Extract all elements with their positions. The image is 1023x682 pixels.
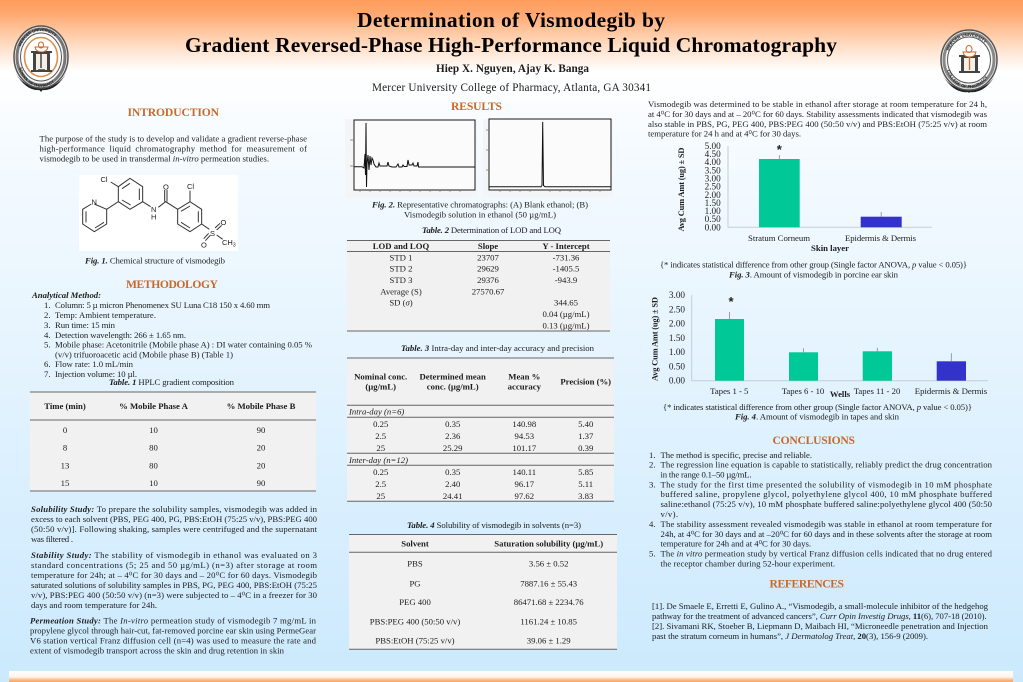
table 2: LOD and LOQ: Slope bbox=[478, 241, 498, 251]
figure 3 note and caption: {* indicates statistical difference from other group (Single factor ANOVA, p value < 0.05)} bbox=[660, 260, 967, 270]
table 2: LOD and LOQ: 0.04 (µg/mL) bbox=[542, 309, 590, 319]
table 3: accuracy and precision: 0.25 bbox=[373, 419, 388, 429]
table 2: LOD and LOQ: STD 1 bbox=[390, 252, 412, 262]
conclusions list: 2. bbox=[649, 460, 656, 470]
analytical method list bbox=[31, 290, 312, 379]
table 2: LOD and LOQ: 27570.67 bbox=[472, 286, 505, 296]
heading: methodology: METHODOLOGY bbox=[126, 278, 219, 291]
table 3: accuracy and precision: 3.83 bbox=[578, 491, 593, 501]
text: introduction body: high-performance liquid chromatography method for measurement of bbox=[40, 144, 307, 154]
chart: figure 3 skin layer bar chart: Skin layer bbox=[811, 243, 849, 253]
table 2: LOD and LOQ: Y - Intercept bbox=[542, 241, 590, 251]
text: stability results: temperature for 24 h and at 4⁰C for 30 days. bbox=[648, 128, 801, 138]
conclusions list: 3. bbox=[649, 480, 656, 490]
text: introduction body: vismodegib to be used in transdermal in-vitro permeation studies. bbox=[40, 154, 269, 164]
table 2 caption: Table. 2 Determination of LOD and LOQ bbox=[422, 225, 562, 235]
table 3: accuracy and precision: 25.29 bbox=[443, 443, 462, 453]
figure 4 note and caption: Fig. 4. Amount of vismodegib in tapes and skin bbox=[734, 412, 900, 422]
table 3: accuracy and precision: Inter-day (n=12) bbox=[348, 455, 408, 465]
figure 3 note and caption bbox=[660, 260, 967, 280]
chart: figure 3 skin layer bar chart: Avg Cum Amt (ug) ± SD bbox=[677, 148, 686, 232]
table 1: HPLC gradient composition: 10 bbox=[149, 425, 158, 435]
chart: figure 4 tapes and skin bar chart: Epidermis & Dermis bbox=[915, 386, 988, 396]
references list: pathway for the treatment of advanced cancers”, Curr Opin Investig Drugs, 11(6), 707-18 (2010). bbox=[652, 611, 987, 621]
table 1: HPLC gradient composition: 90 bbox=[257, 425, 266, 435]
table 3: accuracy and precision: 5.85 bbox=[578, 467, 593, 477]
table 3: accuracy and precision: conc. (µg/mL) bbox=[427, 382, 479, 392]
table 3: accuracy and precision: 140.11 bbox=[513, 467, 536, 477]
authors: Hiep X. Nguyen, Ajay K. Banga bbox=[436, 63, 589, 75]
heading: results: RESULTS bbox=[451, 100, 502, 113]
text: solubility study: (50:50 v/v)]. Following shaking, samples were centrifuged and the supernatant bbox=[31, 524, 318, 534]
text: stability study: v/v), PBS:PEG 400 (50:50 v/v) (n=3) were subjected to – 4⁰C in a freezer for 30 bbox=[31, 590, 318, 600]
heading: conclusions: CONCLUSIONS bbox=[772, 434, 855, 447]
table 2: LOD and LOQ: -943.9 bbox=[555, 275, 577, 285]
table 2: LOD and LOQ: 29376 bbox=[477, 275, 500, 285]
analytical method list: Detection wavelength: 266 ± 1.65 nm. bbox=[55, 330, 186, 340]
title: Determination of Vismodegib by bbox=[357, 8, 665, 32]
figure 2 caption: Vismodegib solution in ethanol (50 µg/mL) bbox=[404, 210, 556, 220]
chart: figure 4 tapes and skin bar chart: 2.50 bbox=[669, 304, 685, 314]
text: stability results: also stable in PBS, PG, PEG 400, PBS:PEG 400 (50:50 v/v) and PBS:EtOH (75:25 v/v) at room bbox=[648, 119, 987, 129]
table 2: LOD and LOQ: SD (σ) bbox=[389, 298, 413, 308]
title: Gradient Reversed-Phase High-Performance Liquid Chromatography bbox=[185, 33, 837, 57]
references list: [1]. De Smaele E, Erretti E, Gulino A., “Vismodegib, a small-molecule inhibitor of the hedgehog bbox=[652, 601, 989, 611]
figure 4 note and caption bbox=[663, 402, 972, 422]
text: introduction body bbox=[40, 134, 307, 164]
table 3: accuracy and precision: Nominal conc. bbox=[354, 372, 407, 382]
table 1: HPLC gradient composition: 0 bbox=[63, 425, 68, 435]
table 4: solubility in solvents: PBS bbox=[407, 558, 423, 568]
analytical method list: Injection volume: 10 µl. bbox=[55, 369, 137, 379]
bar: tapes 6-10 bbox=[789, 352, 818, 381]
figure 2B: vismodegib chromatogram bbox=[483, 119, 613, 197]
table 2: LOD and LOQ: -731.36 bbox=[553, 252, 580, 262]
table 4: solubility in solvents: PG bbox=[409, 578, 421, 588]
conclusions list: 24h, at 4⁰C for 30 days and at –20⁰C for 60 days and in these solvents after the storage at room bbox=[660, 529, 992, 539]
table 3: accuracy and precision: 1.37 bbox=[578, 431, 594, 441]
bar: tapes 11-20 bbox=[863, 351, 892, 381]
table 3: accuracy and precision: Determined mean bbox=[420, 372, 486, 382]
chart: figure 4 tapes and skin bar chart: 2.00 bbox=[669, 319, 685, 329]
text: stability study: Stability Study: The stability of vismodegib in ethanol was evaluated on 3 bbox=[31, 550, 317, 560]
table 2: LOD and LOQ bbox=[347, 240, 610, 331]
chart: figure 4 tapes and skin bar chart bbox=[650, 290, 988, 399]
table 4 caption: Table. 4 Solubility of vismodegib in solvents (n=3) bbox=[407, 520, 581, 530]
text: solubility study bbox=[31, 504, 318, 544]
table 2: LOD and LOQ: 29629 bbox=[477, 264, 499, 274]
text: permeation study: extent of vismodegib transport across the skin and drug retention in skin bbox=[30, 646, 285, 656]
analytical method list: 5. bbox=[44, 340, 51, 350]
table 2: LOD and LOQ: STD 2 bbox=[390, 264, 412, 274]
chart: figure 4 tapes and skin bar chart: 3.00 bbox=[669, 290, 685, 300]
conclusions list: 1. bbox=[649, 450, 656, 460]
table 1: HPLC gradient composition: 15 bbox=[61, 478, 69, 488]
footer band bbox=[9, 671, 1013, 682]
table 1: HPLC gradient composition: % Mobile Phase B bbox=[227, 401, 296, 411]
analytical method list: 7. bbox=[44, 369, 51, 379]
table 3: accuracy and precision: 140.98 bbox=[512, 419, 537, 429]
text: solubility study: Solubility Study: To prepare the solubility samples, vismodegib was added in bbox=[31, 504, 318, 514]
chart: figure 3 skin layer bar chart: 1.00 bbox=[705, 206, 721, 216]
bar: epidermis and dermis bbox=[861, 217, 902, 227]
text: stability results: at 4⁰C for 30 days and at – 20⁰C for 60 days. Stability assessments indicated that vismodegib was bbox=[648, 109, 988, 119]
table 3: accuracy and precision: 5.11 bbox=[578, 479, 593, 489]
conclusions list: 5. bbox=[649, 548, 656, 558]
table 4: solubility in solvents: Saturation solubility (µg/mL) bbox=[494, 538, 603, 548]
text: permeation study: V6 station vertical Franz diffusion cell (n=4) was used to measure the rate and bbox=[30, 636, 317, 646]
analytical method list: Column: 5 µ micron Phenomenex SU Luna C18 150 x 4.60 mm bbox=[55, 300, 270, 310]
table 3: accuracy and precision: 0.35 bbox=[445, 419, 460, 429]
affiliation: Mercer University College of Pharmacy, Atlanta, GA 30341 bbox=[372, 82, 651, 94]
conclusions list: The method is specific, precise and reliable. bbox=[660, 450, 812, 460]
figure 1: chemical structure of vismodegib: O bbox=[201, 240, 207, 250]
references list bbox=[652, 601, 989, 641]
conclusions list: The stability assessment revealed vismodegib was stable in ethanol at room temperature for bbox=[660, 519, 992, 529]
table 3: accuracy and precision: Intra-day (n=6) bbox=[348, 406, 404, 416]
significance star: * bbox=[777, 142, 783, 157]
heading: references: REFERENCES bbox=[770, 578, 844, 590]
title bbox=[185, 8, 837, 57]
table 4: solubility in solvents: 39.06 ± 1.29 bbox=[527, 636, 571, 646]
figure 1: chemical structure of vismodegib: N bbox=[151, 205, 156, 214]
table 1: HPLC gradient composition bbox=[30, 392, 316, 491]
chart: figure 3 skin layer bar chart: 0.50 bbox=[705, 214, 721, 224]
table 3: accuracy and precision: 97.62 bbox=[515, 491, 534, 501]
figure 1: chemical structure of vismodegib: Cl bbox=[187, 182, 194, 191]
analytical method list: Mobile phase: Acetonitrile (Mobile phase A) : DI water containing 0.05 % bbox=[55, 340, 312, 350]
table 2: LOD and LOQ: LOD and LOQ bbox=[373, 241, 429, 251]
table 3: accuracy and precision: 101.17 bbox=[512, 443, 537, 453]
table 3: accuracy and precision: 2.36 bbox=[445, 431, 461, 441]
chart: figure 4 tapes and skin bar chart: 1.50 bbox=[669, 333, 685, 343]
chart: figure 3 skin layer bar chart: 4.50 bbox=[705, 149, 721, 159]
table 3: accuracy and precision: 2.5 bbox=[375, 431, 386, 441]
table 3: accuracy and precision: 5.40 bbox=[578, 419, 594, 429]
bar: epidermis and dermis bbox=[937, 361, 966, 381]
chart: figure 3 skin layer bar chart: 2.00 bbox=[705, 190, 721, 200]
table 4: solubility in solvents: PBS:PEG 400 (50:50 v/v) bbox=[370, 616, 460, 626]
analytical method list: 2. bbox=[44, 310, 51, 320]
text: stability results bbox=[648, 99, 988, 138]
conclusions list: temperature for 24h and at 4⁰C for 30 days. bbox=[660, 538, 811, 548]
table 3: accuracy and precision: 0.35 bbox=[445, 467, 460, 477]
chart: figure 3 skin layer bar chart: Epidermis & Dermis bbox=[845, 233, 917, 243]
table 1: HPLC gradient composition: 20 bbox=[257, 442, 266, 452]
figure 1: chemical structure of vismodegib: O bbox=[163, 182, 169, 192]
analytical method list: Temp: Ambient temperature. bbox=[55, 310, 156, 320]
chart: figure 3 skin layer bar chart: 5.00 bbox=[705, 141, 721, 151]
references list: [2]. Sivamani RK, Stoeber B, Liepmann D, Maibach HI, “Microneedle penetration and Injection bbox=[652, 621, 989, 631]
table 4: solubility in solvents: Solvent bbox=[401, 538, 429, 548]
table 4: solubility in solvents: PBS:EtOH (75:25 v/v) bbox=[375, 636, 455, 646]
figure 4 note and caption: {* indicates statistical difference from other group (Single factor ANOVA, p value < 0.05)} bbox=[663, 402, 972, 412]
icon: right university seal bbox=[940, 29, 998, 93]
figure 1: chemical structure of vismodegib: CH bbox=[222, 238, 233, 247]
table 4: solubility in solvents: 7887.16 ± 55.43 bbox=[520, 578, 577, 588]
table 4: solubility in solvents: PEG 400 bbox=[399, 597, 431, 607]
conclusions list: The regression line equation is capable to statistically, reliably predict the drug concentration bbox=[660, 460, 993, 470]
conclusions list: buffered saline, propylene glycol, polyethylene glycol 400, 10 mM phosphate buffered bbox=[660, 489, 993, 499]
chart: figure 4 tapes and skin bar chart: Tapes 11 - 20 bbox=[854, 386, 901, 396]
text: stability results: Vismodegib was determined to be stable in ethanol after storage at room temperature for 24 h, bbox=[648, 99, 987, 109]
conclusions list: The in vitro permeation study by vertical Franz diffusion cells indicated that no drug entered bbox=[660, 548, 993, 558]
chart: figure 4 tapes and skin bar chart: Avg Cum Amt (ug) ± SD bbox=[650, 297, 660, 381]
chart: figure 3 skin layer bar chart bbox=[677, 141, 932, 253]
table 1: HPLC gradient composition: 80 bbox=[149, 442, 158, 452]
table 3: accuracy and precision: 0.39 bbox=[578, 443, 593, 453]
text: stability study: temperature for 24h; at – 4⁰C for 30 days and – 20⁰C for 60 days. Vismodegib bbox=[31, 570, 318, 580]
significance star: * bbox=[728, 294, 734, 309]
conclusions list: 4. bbox=[649, 519, 656, 529]
table 3: accuracy and precision bbox=[347, 358, 614, 501]
table 3: accuracy and precision: accuracy bbox=[508, 382, 542, 392]
table 1: HPLC gradient composition: 90 bbox=[257, 478, 266, 488]
analytical method list: 4. bbox=[44, 330, 51, 340]
table 3: accuracy and precision: (µg/mL) bbox=[365, 382, 396, 392]
text: stability study bbox=[31, 550, 318, 610]
chart: figure 4 tapes and skin bar chart: Tapes 6 - 10 bbox=[782, 386, 825, 396]
table 1: HPLC gradient composition: Time (min) bbox=[44, 401, 86, 411]
text: permeation study: Permeation Study: The In-vitro permeation study of vismodegib 7 mg/mL in bbox=[30, 616, 317, 626]
table 3: accuracy and precision: Mean % bbox=[508, 372, 540, 382]
table 4: solubility in solvents bbox=[349, 534, 617, 649]
text: stability study: days and room temperature for 24h. bbox=[31, 600, 157, 610]
table 4: solubility in solvents: 86471.68 ± 2234.76 bbox=[514, 597, 584, 607]
conclusions list: saline:ethanol (75:25 v/v), 10 mM phosphate buffered saline:polyethylene glycol 400 (50:50 bbox=[660, 499, 993, 509]
analytical method list: 6. bbox=[44, 359, 51, 369]
table 3: accuracy and precision: 25 bbox=[376, 491, 385, 501]
chart: figure 4 tapes and skin bar chart: 0.00 bbox=[669, 376, 685, 386]
table 1: HPLC gradient composition: 80 bbox=[149, 460, 158, 470]
icon: right university seal: COLLEGE OF PHARMACY bbox=[947, 70, 988, 88]
figure 1: chemical structure of vismodegib: O bbox=[220, 218, 226, 227]
table 3: accuracy and precision: 0.25 bbox=[373, 467, 388, 477]
table 1: HPLC gradient composition: 13 bbox=[61, 460, 69, 470]
table 3 caption: Table. 3 Intra-day and inter-day accuracy and precision bbox=[401, 343, 595, 353]
analytical method list: 3. bbox=[44, 320, 51, 330]
figure 3 note and caption: Fig. 3. Amount of vismodegib in porcine ear skin bbox=[728, 270, 899, 280]
table 3: accuracy and precision: 25 bbox=[376, 443, 385, 453]
analytical method list: Flow rate: 1.0 mL/min bbox=[55, 359, 134, 369]
chart: figure 3 skin layer bar chart: 3.50 bbox=[705, 165, 721, 175]
table 3: accuracy and precision: 24.41 bbox=[443, 491, 462, 501]
icon: left university seal: MERCER UNIVERSITY bbox=[18, 28, 57, 46]
text: stability study: saturated solutions of solubility samples in PBS, PG, PEG 400, PBS:EtOH (75:25 bbox=[31, 580, 317, 590]
table 3: accuracy and precision: 2.40 bbox=[445, 479, 461, 489]
chart: figure 3 skin layer bar chart: 4.00 bbox=[705, 157, 721, 167]
table 3: accuracy and precision: 96.17 bbox=[515, 479, 535, 489]
analytical method list: Run time: 15 min bbox=[55, 320, 116, 330]
figure 1: chemical structure of vismodegib: S bbox=[210, 229, 215, 238]
conclusions list: The study for the first time presented the solubility of vismodegib in 10 mM phosphate bbox=[660, 480, 992, 490]
conclusions list: in the range 0.1–50 µg/mL. bbox=[660, 470, 752, 480]
conclusions list bbox=[649, 450, 993, 568]
table 4: solubility in solvents: 1161.24 ± 10.85 bbox=[520, 616, 577, 626]
text: permeation study bbox=[30, 616, 317, 656]
figure 2 caption bbox=[371, 200, 588, 220]
figure 1: chemical structure of vismodegib: N bbox=[92, 198, 97, 206]
table 2: LOD and LOQ: 23707 bbox=[477, 252, 500, 262]
icon: left university seal bbox=[13, 25, 69, 92]
chart: figure 4 tapes and skin bar chart: Tapes 1 - 5 bbox=[710, 386, 748, 396]
figure 1: chemical structure of vismodegib: H bbox=[151, 212, 156, 222]
table 1: HPLC gradient composition: 20 bbox=[257, 460, 266, 470]
table 1 caption: Table. 1 HPLC gradient composition bbox=[109, 377, 235, 387]
table 3: accuracy and precision: 2.5 bbox=[375, 479, 386, 489]
analytical method list: 1. bbox=[44, 300, 51, 310]
analytical method list: (v/v) trifuoroacetic acid (Mobile phase B) (Table 1) bbox=[55, 350, 233, 360]
figure 2 caption: Fig. 2. Representative chromatographs: (A) Blank ethanol; (B) bbox=[371, 200, 588, 210]
chart: figure 3 skin layer bar chart: 2.50 bbox=[705, 182, 721, 192]
text: solubility study: excess to each solvent (PBS, PEG 400, PG, PBS:EtOH (75:25 v/v), PBS:PEG 400 bbox=[31, 514, 318, 524]
bar: stratum corneum bbox=[759, 159, 800, 227]
figure 1: chemical structure of vismodegib: Cl bbox=[100, 175, 108, 184]
conclusions list: the receptor chamber during 52-hour experiment. bbox=[660, 558, 835, 568]
table 2: LOD and LOQ: STD 3 bbox=[390, 275, 412, 285]
table 1: HPLC gradient composition: 10 bbox=[149, 478, 158, 488]
text: solubility study: was filtered . bbox=[31, 534, 73, 544]
text: introduction body: The purpose of the study is to develop and validate a gradient reverse-phase bbox=[40, 134, 307, 144]
table 2: LOD and LOQ: 0.13 (µg/mL) bbox=[542, 320, 590, 330]
conclusions list: v/v). bbox=[660, 509, 678, 519]
chart: figure 4 tapes and skin bar chart: Wells bbox=[830, 389, 851, 399]
figure 2A: blank ethanol chromatogram bbox=[345, 119, 477, 197]
figure 1 caption: Fig. 1. Chemical structure of vismodegib bbox=[84, 256, 226, 266]
chart: figure 4 tapes and skin bar chart: 0.50 bbox=[669, 361, 685, 371]
chart: figure 4 tapes and skin bar chart: 1.00 bbox=[669, 347, 685, 357]
analytical method list: Analytical Method: bbox=[31, 290, 101, 300]
references list: past the stratum corneum in humans”, J Dermatolog Treat, 20(3), 156-9 (2009). bbox=[652, 631, 928, 641]
icon: left university seal: SCHOOL OF PHARMACY bbox=[19, 67, 54, 87]
figure 1: chemical structure of vismodegib: 3 bbox=[233, 242, 236, 248]
heading: introduction: INTRODUCTION bbox=[128, 106, 220, 119]
text: stability study: standard concentrations (5; 25 and 50 µg/mL) (n=3) after storage at room bbox=[31, 560, 317, 570]
table 2: LOD and LOQ: -1405.5 bbox=[553, 264, 579, 274]
table 2: LOD and LOQ: 344.65 bbox=[554, 298, 578, 308]
chart: figure 3 skin layer bar chart: 1.50 bbox=[705, 198, 721, 208]
table 4: solubility in solvents: 3.56 ± 0.52 bbox=[529, 558, 568, 568]
table 1: HPLC gradient composition: % Mobile Phase A bbox=[119, 401, 189, 411]
table 3: accuracy and precision: 94.53 bbox=[515, 431, 534, 441]
bar: tapes 1-5 bbox=[715, 319, 744, 381]
icon: right university seal: MERCER UNIVERSITY bbox=[946, 33, 987, 50]
chart: figure 3 skin layer bar chart: 0.00 bbox=[705, 222, 721, 232]
text: permeation study: propylene glycol through hair-cut, fat-removed porcine ear skin using PermeGear bbox=[30, 626, 316, 636]
table 1: HPLC gradient composition: 8 bbox=[63, 442, 68, 452]
table 3: accuracy and precision: Precision (%) bbox=[560, 376, 611, 386]
table 2: LOD and LOQ: Average (S) bbox=[380, 286, 422, 296]
chart: figure 3 skin layer bar chart: Stratum Corneum bbox=[748, 233, 810, 243]
chart: figure 3 skin layer bar chart: 3.00 bbox=[705, 174, 721, 184]
figure 1: chemical structure of vismodegib bbox=[79, 175, 238, 251]
